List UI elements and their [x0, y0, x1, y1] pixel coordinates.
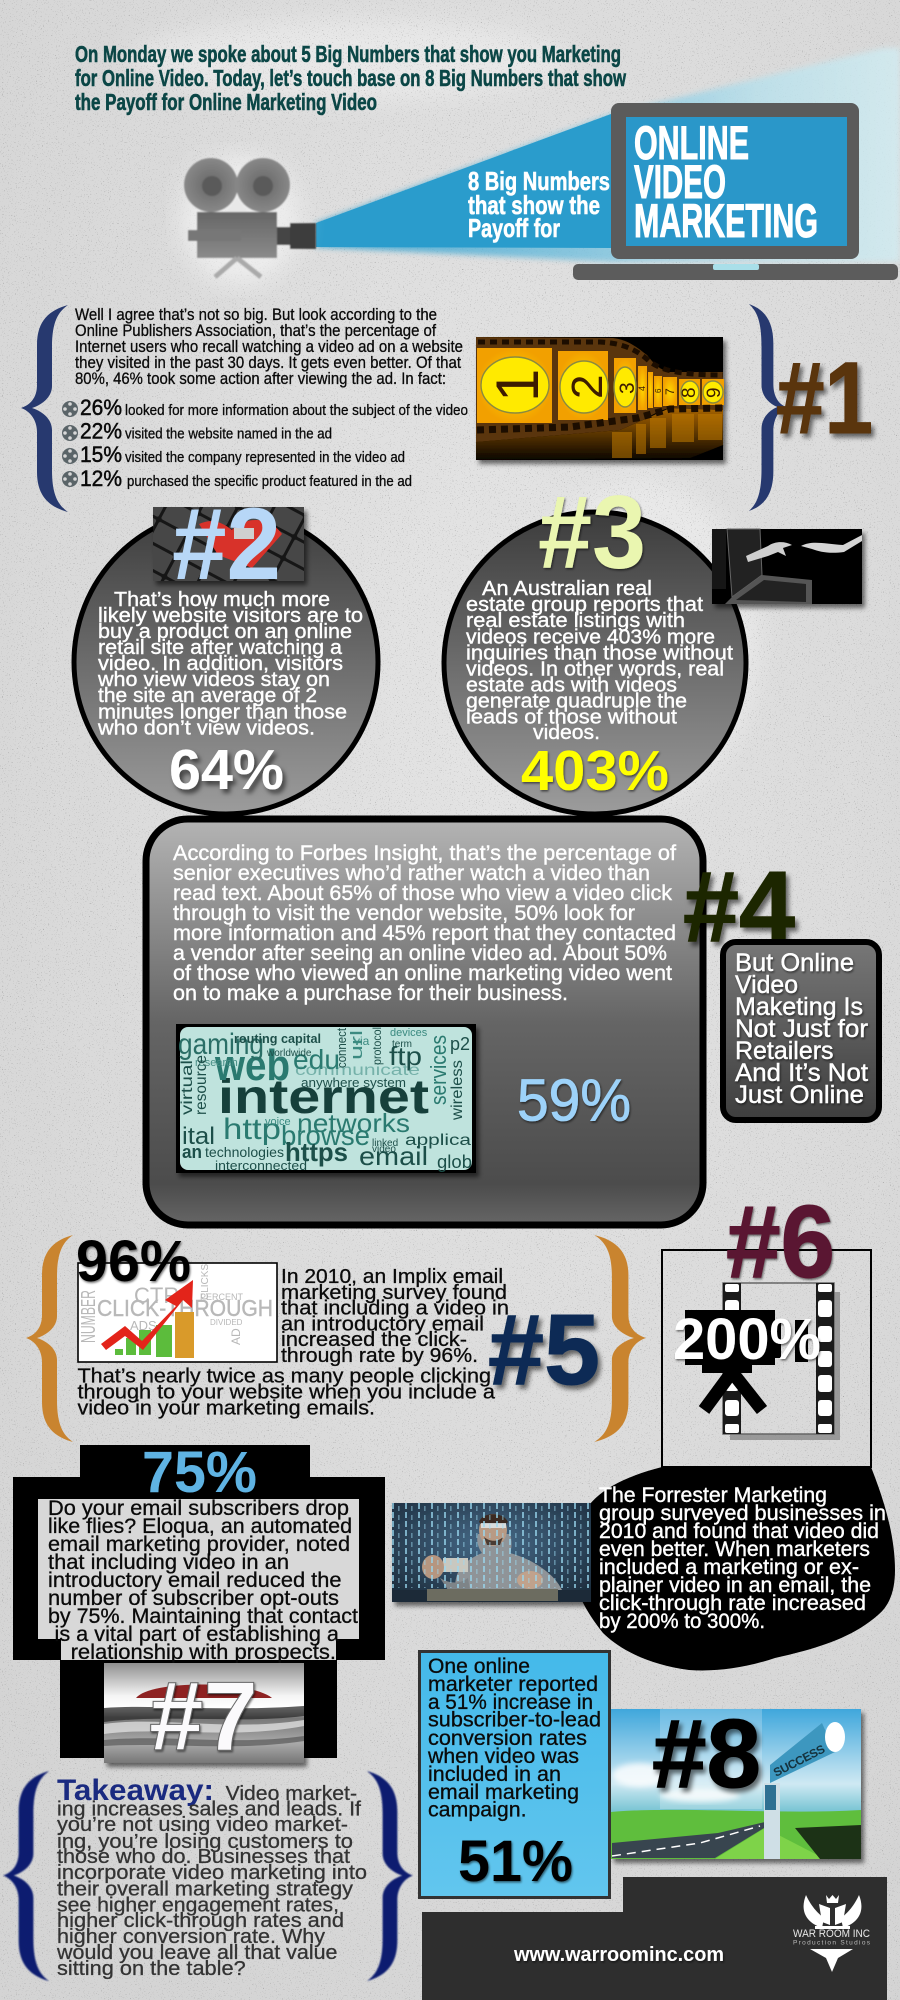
body text: incorporate video marketing into — [57, 1861, 367, 1884]
intro heading: for Online Video. Today, let’s touch base on 8 Big Numbers that show — [75, 65, 626, 91]
image: internet word cloud: linked — [372, 1138, 398, 1149]
panel: number 5 — [26, 1229, 646, 1442]
image: click-through chart: AD — [229, 1328, 243, 1345]
image: internet word cloud: p2 — [450, 1034, 470, 1054]
title: online video marketing — [634, 116, 818, 247]
panel: forrester blob: by 200% to 300%. — [599, 1610, 765, 1633]
image: keyboard with red heart key — [153, 507, 304, 581]
laptop with title — [573, 103, 898, 280]
panel: 51% callout — [420, 1652, 610, 1898]
image: internet word cloud: voice — [265, 1116, 291, 1128]
image: success road sign: SUCCESS — [771, 1742, 827, 1780]
image: internet word cloud: video — [372, 1144, 396, 1155]
left brace — [26, 1235, 73, 1442]
icon: film frame and camera — [685, 1283, 840, 1440]
body text: of those who viewed an online marketing video went — [173, 961, 672, 985]
body text: who view videos stay on — [97, 668, 330, 691]
image: film strip countdown: 8 — [679, 387, 700, 398]
image: internet word cloud: email — [359, 1141, 428, 1171]
body text: likely website visitors are to — [98, 604, 363, 627]
body text: retail site after watching a — [98, 636, 343, 659]
panel: forrester blob: click-through rate increased — [599, 1592, 866, 1615]
image: film strip countdown: 7 — [663, 388, 677, 395]
body text: ing, you’re losing customers to — [57, 1830, 353, 1853]
image: internet word cloud: glob — [437, 1152, 472, 1172]
panel: number 1 — [21, 304, 873, 512]
callout: not just for retailers: But Online — [735, 949, 854, 977]
statistic: 51% — [458, 1829, 573, 1894]
statistic: 403% — [521, 739, 669, 803]
image: man at computer — [392, 1503, 591, 1602]
body text: That’s nearly twice as many people clicking — [78, 1365, 491, 1388]
image: internet word cloud: term — [392, 1039, 412, 1050]
logo: war room inc: WAR ROOM INC — [793, 1928, 870, 1940]
body text: you’re not using video market- — [57, 1813, 348, 1836]
panel: 51% callout: when video was — [427, 1745, 579, 1768]
body text: through rate by 96%. — [281, 1344, 478, 1367]
intro heading — [75, 41, 626, 115]
body text: leads of those without — [466, 706, 677, 729]
right brace — [594, 1235, 646, 1442]
callout: not just for retailers: Maketing Is — [735, 993, 863, 1021]
body text: increased the click- — [281, 1328, 467, 1351]
body text: An Australian real — [482, 577, 652, 600]
image: internet word cloud: routing capital — [234, 1031, 321, 1046]
bullet list: looked for more information about the subject of the video — [125, 402, 468, 419]
body text: that including a video in — [281, 1296, 509, 1320]
bullet list: visited the company represented in the video ad — [125, 449, 405, 466]
panel: number 4 — [146, 819, 795, 1225]
image: internet word cloud: browse — [281, 1120, 370, 1151]
body text: that including video in an — [48, 1550, 289, 1574]
body text: inquiries than those without — [466, 642, 733, 664]
image: internet word cloud: interconnected — [215, 1158, 307, 1173]
body text: see higher engagement rates, — [57, 1894, 339, 1916]
image: click-through chart: ADS — [130, 1318, 157, 1333]
image: internet word cloud: internet — [218, 1071, 429, 1124]
callout: not just for retailers — [723, 942, 879, 1120]
body text: video. In addition, visitors — [98, 652, 343, 675]
bullet list: purchased the specific product featured in the ad — [127, 473, 412, 490]
body text: higher conversion rate. Why — [57, 1925, 326, 1948]
image: internet word cloud: gaming — [178, 1028, 264, 1061]
body text: read text. About 65% of those who view a video click — [173, 881, 672, 905]
image: internet word cloud: edu — [293, 1044, 340, 1075]
panel: forrester blob — [574, 1467, 895, 1670]
image: click-through chart: CLICKS — [200, 1264, 211, 1300]
statistic: 200% — [673, 1307, 821, 1372]
black backing shape — [13, 1445, 385, 1758]
body text: would you leave all that value — [56, 1941, 337, 1964]
callout: not just for retailers: And It’s Not — [735, 1059, 868, 1087]
body text: ing increases sales and leads. If — [57, 1798, 361, 1820]
body text — [48, 1496, 358, 1664]
panel: 51% callout: included in an — [428, 1763, 561, 1786]
right brace — [367, 1771, 413, 1981]
statistic: 75% — [142, 1440, 257, 1505]
beam caption: Payoff for — [468, 213, 560, 243]
intro text: they visited in the past 30 days. It gets even better. Of that — [75, 353, 461, 372]
panel: number 7 and email text — [13, 1440, 385, 1771]
body text: number of subscriber opt-outs — [48, 1586, 339, 1610]
panel: forrester blob: even better. When marketers — [599, 1538, 870, 1561]
right brace — [749, 304, 786, 511]
intro text: 80%, 46% took some action after viewing the ad. In fact: — [75, 369, 446, 388]
image: internet word cloud: https — [285, 1137, 348, 1167]
image: internet word cloud: connect — [334, 1028, 349, 1068]
body text: introductory email reduced the — [48, 1568, 342, 1592]
image: internet word cloud: networks — [297, 1108, 410, 1138]
panel: forrester blob: plainer video in an email, the — [599, 1574, 871, 1597]
panel: 51% callout: campaign. — [428, 1798, 526, 1822]
image: click-through chart: DIVIDED — [210, 1318, 243, 1327]
number label: #4 — [683, 851, 795, 963]
image: internet word cloud — [176, 1024, 476, 1173]
bullet list: visited the website named in the ad — [125, 426, 332, 442]
image: pillows with red arch — [104, 1663, 304, 1763]
body text: According to Forbes Insight, that’s the percentage of — [173, 841, 676, 865]
panel: forrester blob: included a marketing or ex- — [599, 1556, 859, 1579]
left brace — [3, 1771, 49, 1981]
number label: #3 — [538, 475, 646, 591]
image: success road sign — [611, 1709, 861, 1859]
title: online video marketing: ONLINE — [634, 116, 749, 169]
image: internet word cloud: devices — [390, 1027, 428, 1039]
image: click-through chart — [78, 1263, 277, 1362]
number label: #7 — [149, 1661, 258, 1771]
image: film strip countdown — [476, 337, 725, 460]
image: click-through chart: PERCENT — [200, 1292, 244, 1302]
body text: more information and 45% report that they contacted — [173, 921, 676, 945]
image: internet word cloud: via — [354, 1034, 370, 1048]
body text: their overall marketing strategy — [57, 1878, 354, 1901]
body text: like flies? Eloqua, an automated — [48, 1514, 352, 1538]
intro heading: On Monday we spoke about 5 Big Numbers that show you Marketing — [75, 41, 621, 67]
number label: #8 — [652, 1699, 761, 1808]
body text: through to visit the vendor website, 50% look for — [173, 901, 635, 925]
body text: higher click-through rates and — [57, 1909, 344, 1932]
image: click-through chart: NUMBER — [78, 1290, 100, 1343]
body text — [173, 841, 676, 1005]
panel: forrester blob: 2010 and found that video did — [599, 1520, 879, 1543]
body text: real estate listings with — [466, 609, 685, 632]
bullet list: 22% — [80, 418, 122, 444]
image: internet word cloud: url — [347, 1030, 366, 1060]
image: internet word cloud: protocol — [370, 1027, 384, 1065]
body text: sitting on the table? — [57, 1957, 246, 1980]
image: internet word cloud: communicate — [295, 1062, 420, 1079]
panel: 51% callout: marketer reported — [428, 1673, 598, 1696]
body text: email marketing provider, noted — [48, 1532, 350, 1556]
body text: relationship with prospects. — [71, 1640, 336, 1664]
website address: www.warroominc.com — [513, 1944, 724, 1966]
image: click-through chart: CLICK-THROUGH — [97, 1295, 273, 1321]
panel: 51% callout: a 51% increase in — [428, 1691, 593, 1714]
number label: #5 — [488, 1294, 600, 1406]
image: film strip countdown: 2 — [563, 375, 612, 399]
callout: not just for retailers: Just Online — [735, 1081, 864, 1109]
image: internet word cloud: ital — [182, 1123, 215, 1150]
body text: In 2010, an Implix email — [281, 1265, 503, 1288]
body text: estate ads with videos — [466, 674, 677, 697]
body text: the site an average of 2 — [98, 684, 317, 707]
image: internet word cloud: resource — [193, 1055, 210, 1115]
intro text: Well I agree that’s not so big. But look according to the — [75, 305, 437, 324]
logo: war room inc: Production Studios — [793, 1940, 871, 1946]
panel: 51% callout: conversion rates — [428, 1727, 587, 1750]
body text: by 75%. Maintaining that contact — [48, 1604, 358, 1628]
callout: not just for retailers: Not Just for — [735, 1015, 868, 1043]
image: internet word cloud: research — [195, 1057, 238, 1069]
intro text — [75, 305, 463, 388]
title: online video marketing: VIDEO — [634, 155, 726, 208]
body text: Video market- — [226, 1782, 357, 1805]
image: film strip countdown: 9 — [704, 387, 725, 398]
panel: 51% callout: email marketing — [428, 1781, 579, 1804]
body text: Do your email subscribers drop — [48, 1496, 349, 1520]
number label: #1 — [776, 341, 873, 455]
footer — [422, 1877, 887, 2000]
panel: number 6 — [662, 1184, 871, 1467]
statistic: 96% — [76, 1229, 191, 1294]
body text: generate quadruple the — [466, 690, 687, 713]
body text: estate group reports that — [466, 593, 703, 616]
body text: videos receive 403% more — [466, 626, 715, 648]
image: internet word cloud: web — [214, 1041, 290, 1090]
number label: #2 — [172, 487, 281, 601]
body text: is a vital part of establishing a — [54, 1622, 339, 1646]
panel: number 3 circle — [444, 475, 862, 814]
image: internet word cloud: services — [426, 1035, 451, 1105]
image: internet word cloud: applica — [405, 1132, 471, 1149]
bullet list: 26% — [80, 395, 122, 420]
number label: #6 — [726, 1184, 835, 1299]
panel: 51% callout: subscriber-to-lead — [428, 1708, 601, 1732]
panel: forrester blob: The Forrester Marketing — [599, 1484, 827, 1507]
body text: those who do. Businesses that — [57, 1845, 350, 1868]
body text: marketing survey found — [281, 1281, 507, 1304]
body text: video in your marketing emails. — [78, 1396, 375, 1420]
statistic: 59% — [517, 1068, 631, 1134]
panel: forrester blob: group surveyed businesses in — [599, 1502, 886, 1525]
bullet list: 15% — [80, 442, 122, 467]
panel: number 8 — [611, 1699, 861, 1859]
panel: takeaway — [3, 1771, 413, 1981]
projector beam — [316, 48, 900, 262]
image: film strip countdown: 6 — [654, 388, 663, 393]
panel: 51% callout: One online — [428, 1655, 530, 1678]
body text — [56, 1782, 367, 1980]
callout: not just for retailers: Retailers — [735, 1037, 834, 1065]
body text — [466, 577, 733, 744]
bullet list — [62, 395, 468, 491]
body text — [78, 1265, 509, 1420]
body text: through to your website when you include a — [78, 1381, 496, 1404]
statistic: 64% — [169, 738, 284, 802]
image: internet word cloud: ftp — [389, 1041, 422, 1071]
beam caption: 8 Big Numbers — [468, 166, 610, 196]
bullet list: 12% — [80, 466, 122, 491]
body text: minutes longer than those — [98, 700, 347, 724]
heading: Takeaway: — [57, 1774, 214, 1807]
intro heading: the Payoff for Online Marketing Video — [75, 89, 377, 115]
image: internet word cloud: wireless — [449, 1060, 466, 1121]
panel: number 2 circle — [74, 487, 378, 814]
icon: film camera — [180, 155, 316, 285]
body text: senior executives who’d rather watch a video than — [173, 861, 650, 885]
image: film strip countdown: 1 — [484, 369, 551, 402]
body text: videos. In other words, real — [466, 658, 724, 680]
image: internet word cloud: virtual — [179, 1060, 196, 1115]
beam caption: that show the — [468, 190, 600, 220]
body text: videos. — [533, 721, 600, 744]
body text: who don’t view videos. — [97, 716, 315, 740]
body text: an introductory email — [281, 1312, 484, 1336]
body text — [97, 588, 363, 740]
image: internet word cloud: an — [182, 1142, 202, 1162]
image: internet word cloud: technologies — [205, 1144, 284, 1160]
intro text: Online Publishers Association, that’s the percentage of — [75, 321, 436, 340]
body text: a vendor after seeing an online video ad. About 50% — [173, 941, 667, 965]
image: internet word cloud: worldwide — [266, 1048, 312, 1059]
body text: on to make a purchase for their business. — [173, 981, 568, 1005]
callout: not just for retailers: Video — [735, 971, 798, 999]
text window — [38, 1499, 359, 1660]
image: hands reaching from laptop — [712, 529, 862, 604]
logo: war room inc — [793, 1895, 871, 1972]
image: click-through chart: CTR — [134, 1283, 179, 1308]
body text: That’s how much more — [114, 588, 330, 611]
image: internet word cloud: http — [223, 1113, 281, 1146]
image: film strip countdown: 4 — [637, 386, 647, 391]
body text: buy a product on an online — [98, 620, 352, 643]
image: film strip countdown: 3 — [616, 382, 639, 394]
left brace — [21, 305, 68, 512]
intro text: Internet users who recall watching a video ad on a website — [75, 337, 463, 356]
beam caption — [468, 166, 610, 243]
image: internet word cloud: anywhere system — [301, 1075, 406, 1090]
